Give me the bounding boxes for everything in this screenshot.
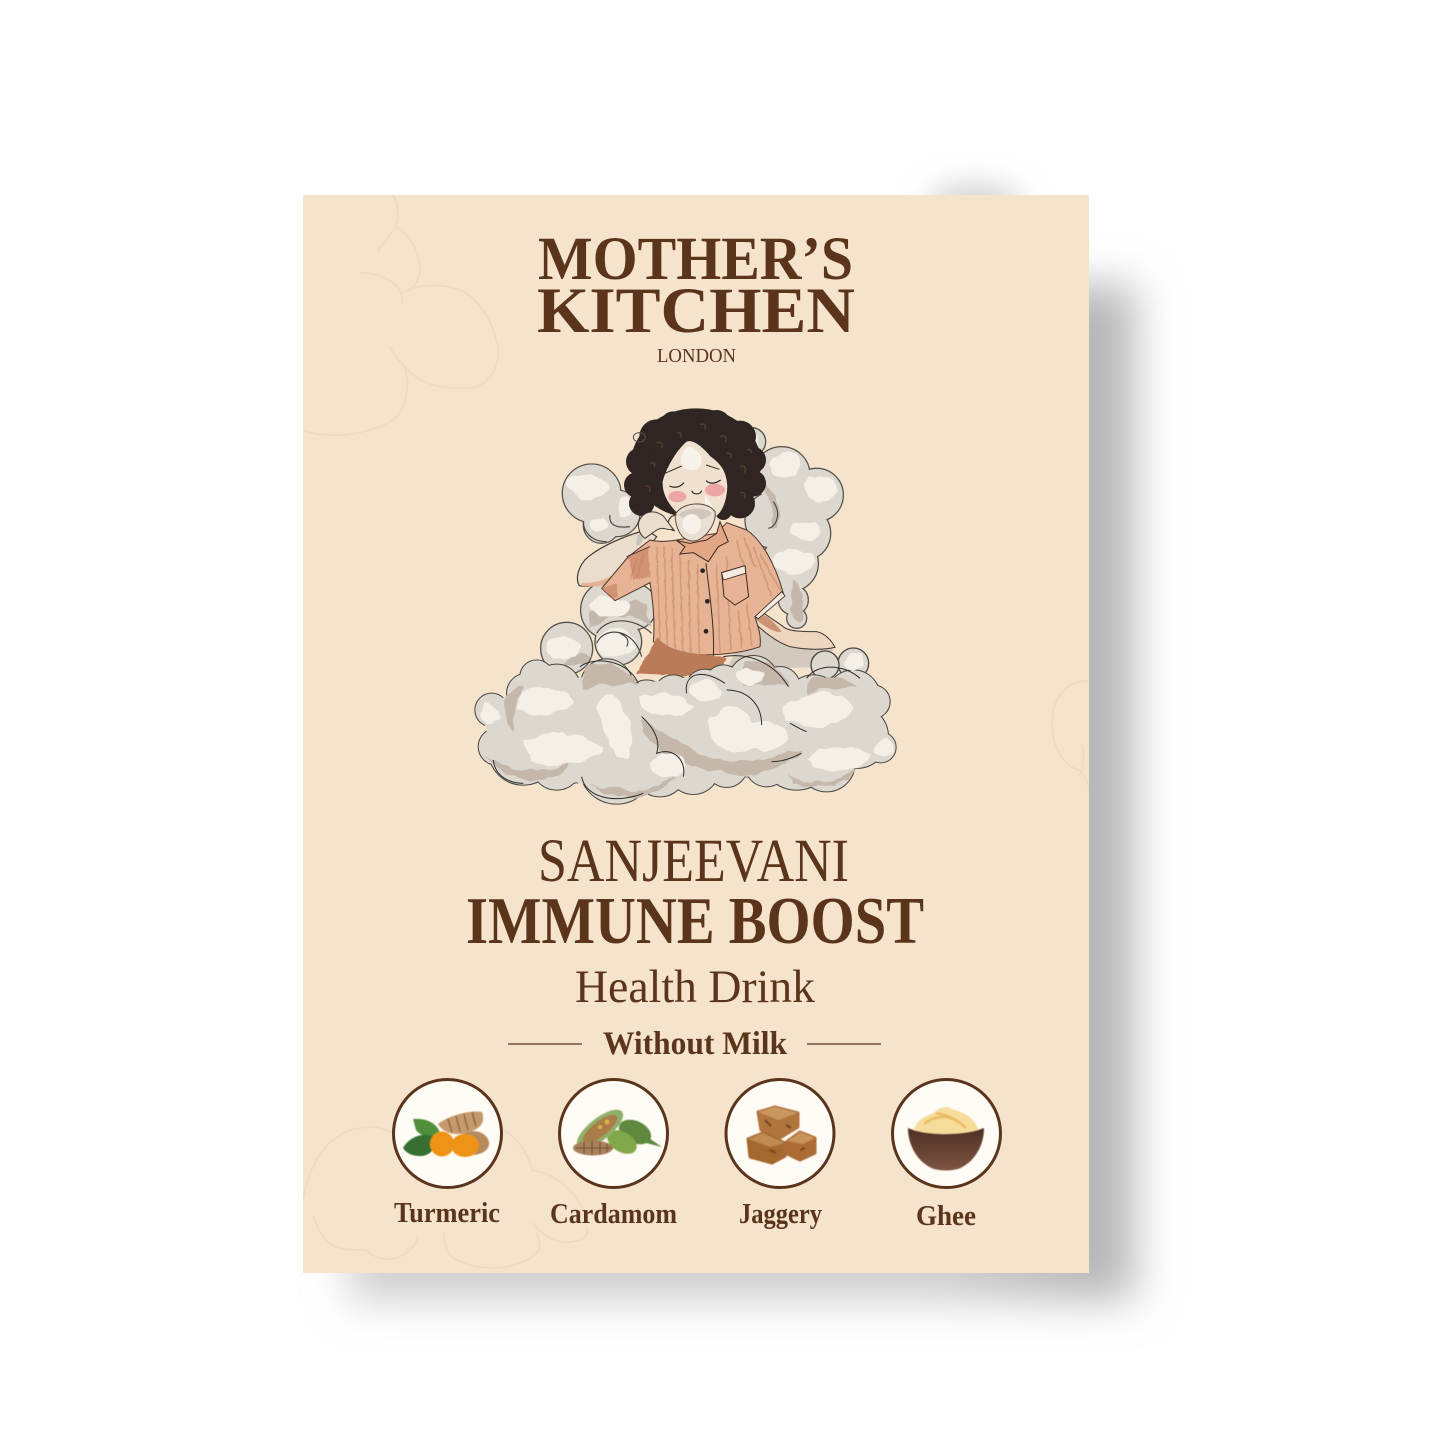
- main bottom cloud: [475, 648, 896, 804]
- raised arm: [577, 530, 657, 587]
- ingredient label: jaggery: Jaggery: [739, 1199, 822, 1230]
- striped pyjama shirt: [602, 522, 785, 677]
- label: Without Milk with rules: Without Milk: [603, 1026, 788, 1062]
- brand logo: Mother's Kitchen London: MOTHER’S: [538, 226, 853, 293]
- ingredient: jaggery: [726, 1080, 834, 1188]
- cloud ink lines: [493, 656, 860, 799]
- ingredient: turmeric: [394, 1080, 502, 1188]
- illustration: girl sipping from a cup on clouds: [475, 408, 896, 804]
- product name: Immune Boost: IMMUNE BOOST: [466, 884, 924, 958]
- brand logo: Mother's Kitchen London: [537, 226, 855, 367]
- brand logo: Mother's Kitchen London: KITCHEN: [537, 275, 855, 347]
- ingredient label: turmeric: Turmeric: [394, 1198, 500, 1229]
- brand logo: Mother's Kitchen London: LONDON: [657, 345, 736, 367]
- infographic canvas: [303, 172, 1160, 1324]
- card drop shadow: [350, 183, 1135, 1300]
- ingredient: cardamom: [560, 1080, 668, 1188]
- curly hair: [624, 408, 766, 520]
- girl's face: [663, 441, 727, 517]
- ingredient: ghee: [892, 1080, 1000, 1188]
- background cloud watermarks: [303, 195, 1089, 1268]
- resting arm and hand on cloud: [727, 612, 835, 670]
- ingredient label: cardamom: Cardamom: [550, 1199, 677, 1230]
- cloud outline and base: [475, 648, 896, 804]
- cloud tan shading: [483, 662, 857, 797]
- subtitle: Health Drink: Health Drink: [575, 961, 815, 1013]
- cloud white highlights: [480, 654, 894, 778]
- packaging card panel: [303, 195, 1089, 1273]
- ingredient label: ghee: Ghee: [916, 1201, 976, 1232]
- tea cup and hand: [633, 433, 715, 541]
- back clouds: [541, 428, 843, 674]
- hair curl texture: [645, 424, 751, 499]
- product name: Sanjeevani: SANJEEVANI: [538, 828, 849, 895]
